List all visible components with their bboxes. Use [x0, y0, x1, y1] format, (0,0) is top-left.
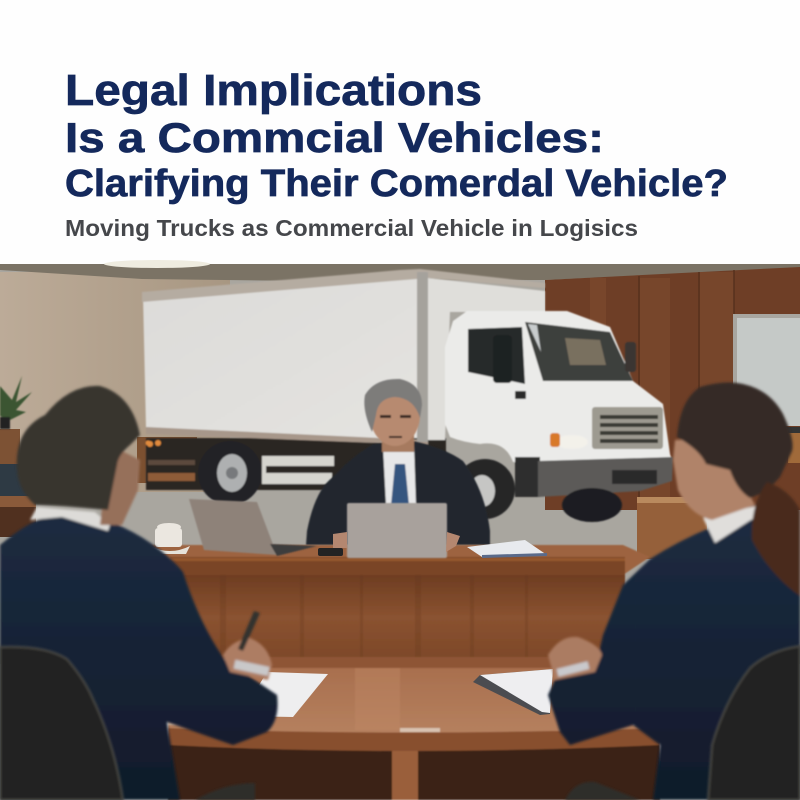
- notebooks: [240, 669, 553, 717]
- hand and pen: [223, 638, 272, 680]
- left chair: [0, 647, 123, 800]
- laptops on the bench: [189, 499, 447, 558]
- hair: [17, 386, 140, 510]
- right attendee: [548, 383, 800, 800]
- face: [673, 440, 755, 520]
- truck box side: [143, 272, 428, 438]
- left chair arm: [195, 783, 255, 800]
- truck cab: [445, 311, 672, 462]
- courtroom background: [0, 260, 800, 664]
- chairs: [0, 646, 800, 800]
- ponytail: [752, 482, 800, 596]
- papers and cup: [150, 523, 547, 558]
- moving truck: [142, 269, 673, 522]
- title: Is a Commcial Vehicles:: [65, 114, 604, 161]
- foreground table: [168, 657, 660, 800]
- judge bench: [130, 545, 650, 659]
- truck rear wheel: [198, 441, 262, 505]
- right chair: [708, 646, 800, 800]
- title: Clarifying Their Comerdal Vehicle?: [65, 163, 728, 205]
- body: [548, 519, 800, 800]
- truck front wheels: [455, 459, 622, 522]
- title: Legal Implications: [65, 66, 482, 115]
- hair: [677, 383, 793, 498]
- hand: [548, 637, 602, 680]
- face: [100, 445, 140, 525]
- judge: [306, 379, 490, 545]
- left attendee: [0, 386, 278, 800]
- icon: potted plant: [0, 376, 32, 429]
- collar: [703, 506, 757, 543]
- truck undercarriage: [146, 438, 446, 490]
- judge hands: [318, 532, 460, 556]
- whiteboard: [735, 316, 800, 463]
- collar: [30, 507, 110, 531]
- right chair arm: [565, 782, 640, 800]
- subtitle: Moving Trucks as Commercial Vehicle in Logisics: [65, 215, 638, 241]
- body: [0, 516, 278, 800]
- title: [65, 66, 728, 205]
